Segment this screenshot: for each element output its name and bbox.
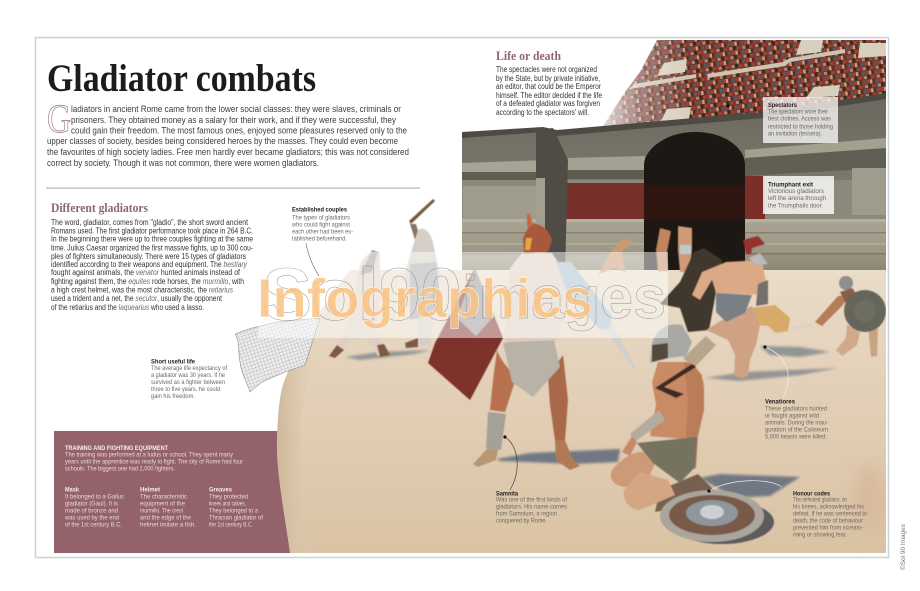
torso — [692, 260, 768, 300]
torso — [650, 362, 702, 440]
arena sand — [277, 270, 886, 553]
torso and arm — [506, 252, 560, 342]
callout: short useful life: survived as a fighter between — [151, 379, 225, 386]
callout: venatiores: These gladiators hunted — [765, 406, 827, 412]
panel heading: TRAINING AND FIGHTING EQUIPMENT — [65, 445, 168, 452]
watermark: Sol 90 images: Sol90 — [262, 253, 462, 336]
arch opening — [644, 132, 745, 274]
callout: honour codes — [793, 490, 867, 538]
heading: Different gladiators — [51, 200, 148, 215]
column: greaves: the 1st century B.C. — [209, 522, 253, 528]
callout: honour codes: death, the code of behaviour — [793, 518, 864, 524]
body text: a high crest helmet, was the most characteristic, the retiarius — [51, 286, 233, 294]
column: greaves: Greaves — [209, 486, 232, 494]
heading: Life or death — [496, 48, 562, 63]
column: helmet: and the edge of the — [140, 514, 191, 522]
column: mask: Mask — [65, 486, 79, 494]
panel intro text — [65, 452, 244, 472]
callout: spectators: restricted to those holding — [768, 124, 833, 130]
callout: short useful life: gain his freedom. — [151, 393, 195, 400]
kilt — [716, 293, 752, 322]
callout: honour codes: ming or showing fear. — [793, 532, 847, 538]
callout: venatiores: guration of the Coliseum — [765, 426, 828, 434]
watermark: Sol 90 images: images — [462, 264, 666, 331]
callout: short useful life: Short useful life — [151, 358, 195, 366]
callout: honour codes: The defeated gladiator, on — [793, 496, 847, 504]
intro paragraph — [47, 96, 409, 169]
legs — [490, 350, 516, 412]
callout: triumphant exit: left the arena through — [768, 195, 826, 202]
relief panels — [463, 186, 536, 219]
callout: triumphant exit: Triumphant exit — [768, 182, 814, 188]
callout: triumphant exit — [763, 176, 834, 214]
callout: honour codes: his knees, acknowledged his — [793, 504, 864, 510]
body text: ples of fighters simultaneously. There were 15 types of gladiators — [51, 252, 246, 261]
arm guard — [630, 410, 665, 441]
far gladiator with round shield — [790, 276, 886, 357]
background gladiators at the gate — [598, 226, 692, 274]
watermark band — [258, 252, 668, 338]
body text: according to the spectators' will. — [496, 108, 589, 117]
column: greaves: Thracian gladiator of — [209, 514, 263, 522]
callout: samnita: gladiators. His name comes — [496, 504, 567, 510]
leader lines — [306, 104, 788, 493]
callout: samnita: from Samnium, a region — [496, 510, 557, 518]
fighter with raised sword — [404, 199, 442, 348]
callout: samnita: Samnita — [496, 490, 518, 498]
callout: venatiores: or fought against wild — [765, 412, 819, 420]
intro paragraph: could gain their freedom. The most famous ones, enjoyed some pleasures reserved only to the — [71, 126, 407, 136]
throwing net — [235, 318, 320, 392]
callout: venatiores: Venatiores — [765, 398, 795, 406]
column: mask: was used by the end — [64, 514, 119, 522]
column: greaves: They protected — [209, 494, 248, 500]
callout: spectators — [763, 97, 838, 143]
panel intro text: years until the apprentice was ready to fight. The city of Rome had four — [65, 458, 244, 466]
body text: In the beginning there were up to three couples fighting at the same — [51, 234, 253, 244]
callout: established couples: Established couples — [292, 206, 347, 214]
callout: short useful life — [151, 358, 227, 400]
leg bands — [683, 336, 716, 368]
intro paragraph: correct by society. Though it was not common, there were women gladiators. — [47, 158, 319, 169]
callout: triumphant exit: Victorious gladiators — [768, 188, 824, 195]
shield — [428, 268, 503, 400]
body text: of a defeated gladiator was forgiven — [496, 99, 600, 108]
arena wall — [462, 93, 886, 275]
sword — [606, 325, 638, 372]
column: greaves — [209, 486, 263, 528]
panel: training and fighting equipment — [54, 431, 294, 553]
drop cap: G — [47, 96, 71, 141]
title: Gladiator combats — [47, 57, 316, 100]
column: mask: of the 1st century B.C. — [65, 522, 122, 528]
body text — [496, 65, 602, 117]
callout: established couples — [291, 206, 353, 242]
body text: The word, gladiator, comes from "gladio", the short sword ancient — [51, 218, 249, 227]
illustration: arena scene — [277, 40, 888, 553]
callout: samnita: Was one of the first kinds of — [496, 496, 567, 504]
body text: an editor, that could be the Emperor — [496, 82, 601, 91]
column: greaves: They belonged to a — [209, 508, 258, 514]
callout: short useful life: three to five years, he could — [151, 386, 220, 393]
intro paragraph: the favourites of high society ladies. Free men hardly ever became gladiators; this was not considered — [47, 147, 409, 158]
callout: venatiores: 5,000 beasts were killed. — [765, 434, 827, 440]
callout: short useful life: The average life expectancy of — [151, 365, 227, 372]
image credit: ©Sol 90 Images — [899, 523, 907, 570]
body text: fought against animals, the venator hunted animals instead of — [51, 268, 241, 277]
column: helmet: murmillo. The crest — [140, 508, 183, 514]
column: mask: made of bronze and — [65, 508, 118, 514]
helmet — [650, 324, 692, 363]
helmet — [523, 224, 552, 254]
callout: venatiores — [765, 398, 828, 440]
pilaster — [536, 128, 568, 274]
thighs — [611, 452, 655, 487]
column: helmet — [140, 486, 196, 528]
body text: fighting against them, the equites rode horses, the murmillo, with — [51, 277, 244, 286]
chest straps — [655, 364, 696, 398]
column: helmet: helmet imitate a fish. — [140, 522, 196, 528]
intro paragraph: ladiators in ancient Rome came from the lower social classes: they were slaves, criminals or — [71, 104, 402, 115]
body text: by the State, but by private initiative, — [496, 74, 600, 83]
red wall panels — [565, 183, 649, 219]
column: helmet: The characteristic — [140, 494, 188, 500]
callout: short useful life: a gladiator was 30 years. If he — [151, 372, 225, 379]
callout: established couples: The types of gladiators — [292, 214, 350, 222]
stands crowd — [598, 40, 886, 130]
callout: established couples: tablished beforehand. — [292, 236, 347, 242]
panel intro text: The training was performed at a ludus or school. They spent many — [65, 452, 234, 458]
arm guard — [756, 280, 768, 306]
callout: venatiores: animals. During the inau- — [765, 420, 828, 426]
body text: himself. The editor decided if the life — [496, 91, 602, 100]
callout: established couples: each other had been es- — [292, 228, 353, 236]
intro paragraph: prisoners. They obtained money as a salary for their work, and if they were successful, they — [71, 115, 396, 126]
callout: honour codes: prevented him from scream- — [793, 524, 863, 532]
body text: used a trident and a net, the secutor, usually the opponent — [51, 294, 223, 303]
column: helmet: equipment of the — [140, 500, 185, 508]
column: greaves: knees and calves. — [209, 500, 246, 508]
column: helmet: Helmet — [140, 486, 161, 494]
callout: spectators: The spectators wore their — [768, 108, 829, 116]
column: mask: It belonged to a Gallus — [65, 494, 124, 500]
column: mask: gladiator (Gaul). It is — [65, 500, 118, 508]
kilt — [503, 336, 560, 397]
helmet — [749, 253, 768, 265]
callout: spectators: an invitation (tessera). — [768, 130, 822, 138]
kneeling gladiator — [611, 324, 718, 512]
fighter with trident — [329, 250, 390, 358]
intro paragraph: upper classes of society, besides being considered heroes by the masses. They could even become — [47, 136, 398, 147]
body text — [51, 218, 253, 312]
plinth — [462, 222, 886, 262]
body text: time. Julius Caesar organized the first massive fights, up to 300 cou- — [51, 244, 253, 252]
body text: The spectacles were not organized — [496, 65, 597, 74]
callout: spectators: Spectators — [768, 102, 797, 109]
tall dark shield — [660, 248, 722, 332]
main gladiator with red shield — [428, 214, 638, 470]
callout: honour codes: Honour codes — [793, 490, 830, 498]
section: life or death — [496, 48, 602, 117]
callout: samnita — [496, 490, 567, 524]
panel intro text: schools. The biggest one had 2,000 fighters. — [65, 466, 175, 472]
round shield on the ground — [660, 490, 774, 544]
kilt — [637, 437, 697, 483]
watermark: Sol 90 images — [262, 253, 666, 336]
callout: honour codes: defeat. If he was sentenced to — [793, 510, 867, 518]
body text: Romans used. The first gladiator performance took place in 264 B.C. — [51, 226, 253, 236]
body text: identified according to their weapons and equipment. The bestiary — [51, 260, 248, 269]
body text: of the retiarius and the laquearius who used a lasso. — [51, 303, 204, 312]
gladiator with tiger — [683, 236, 790, 378]
watermark — [257, 252, 668, 338]
rear leg and foot — [655, 474, 718, 512]
watermark: Infographics: Infographics — [257, 267, 593, 329]
callout: samnita: conquered by Rome. — [496, 518, 547, 524]
tiger — [752, 305, 790, 333]
section: different gladiators — [51, 200, 253, 312]
callout: established couples: who could fight against — [291, 222, 350, 228]
callout: spectators: best clothes. Access was — [768, 116, 831, 122]
sand shadows — [345, 346, 838, 498]
callout: triumphant exit: the Triumphalis door. — [768, 202, 823, 210]
column: mask — [64, 486, 124, 528]
cornice mouldings — [462, 160, 536, 172]
